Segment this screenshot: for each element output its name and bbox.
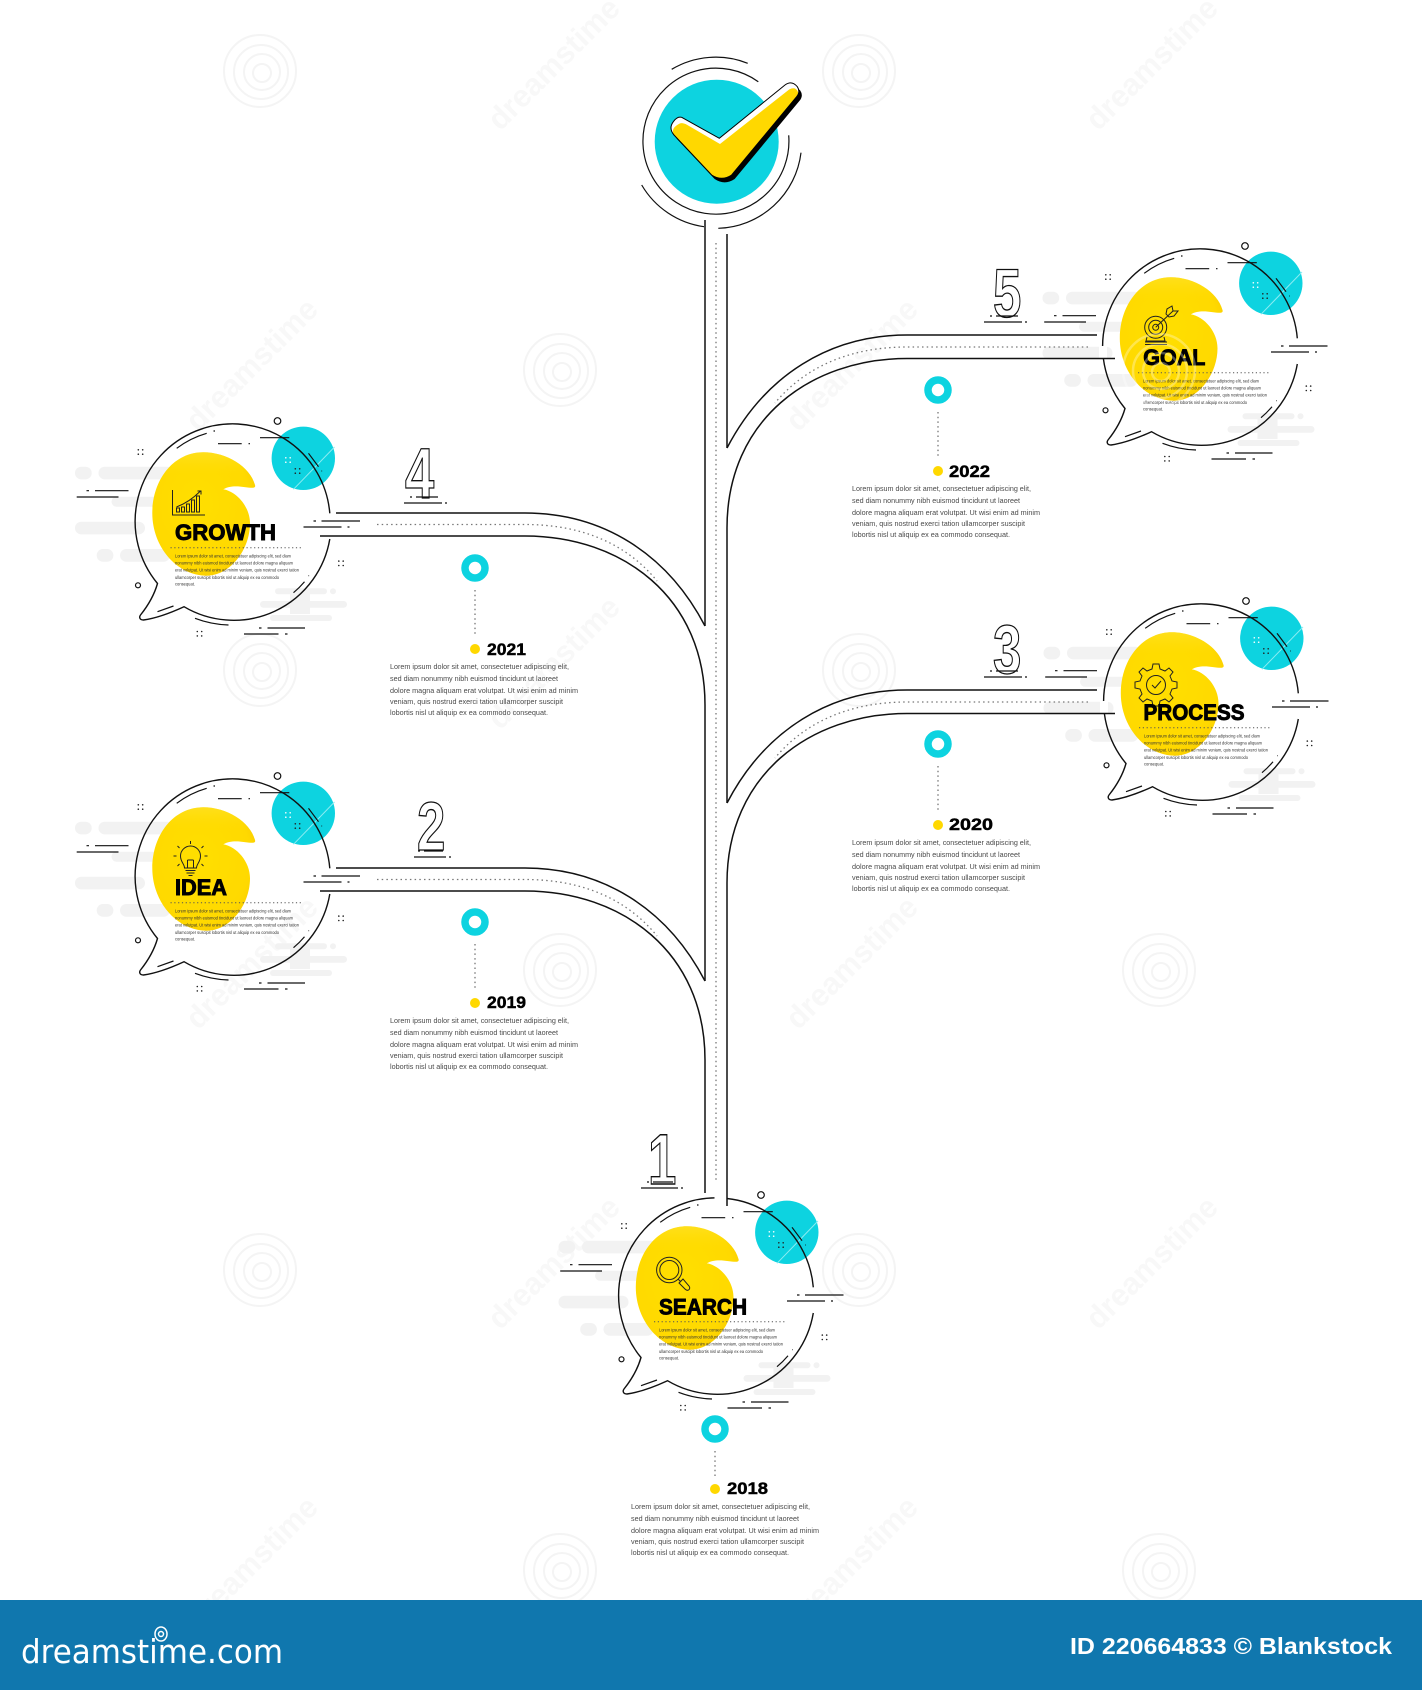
milestone 2021: sed diam nonummy nibh euismod tincidunt ut laoreet — [390, 674, 558, 683]
milestone 2021 — [390, 558, 578, 717]
text block: idea description: nonummy nibh euismod tincidunt ut laoreet dolore magna aliquam — [175, 916, 293, 920]
panel: search bubble — [558, 1192, 844, 1411]
text block: search description: Lorem ipsum dolor sit amet, consectetuer adipiscing elit, sed diam — [659, 1328, 775, 1333]
number 5: 5 — [993, 254, 1021, 332]
milestone 2022: veniam, quis nostrud exerci tation ullamcorper suscipit — [852, 519, 1025, 528]
panel: growth bubble — [75, 418, 360, 637]
milestone 2020: lobortis nisl ut aliquip ex ea commodo consequat. — [852, 884, 1010, 893]
text block: growth description: erat volutpat. Ut wisi enim ad minim veniam, quis nostrud exerci tation — [175, 568, 299, 572]
text block: search description: nonummy nibh euismod tincidunt ut laoreet dolore magna aliquam — [659, 1334, 777, 1340]
watermark pattern: dreamstime — [178, 291, 325, 438]
milestone 2022 — [852, 380, 1040, 539]
heading: process: PROCESS — [1144, 700, 1244, 725]
text block: process description: Lorem ipsum dolor sit amet, consectetuer adipiscing elit, sed diam — [1144, 734, 1260, 739]
milestone 2019: 2019 — [487, 994, 526, 1012]
watermark pattern: dreamstime — [178, 1489, 325, 1636]
text block: idea description: consequat. — [175, 936, 195, 942]
milestone 2021: dolore magna aliquam erat volutpat. Ut wisi enim ad minim — [390, 686, 578, 695]
text block: goal description: ullamcorper suscipit lobortis nisl ut aliquip ex ea commodo — [1143, 400, 1247, 405]
text block: idea description — [175, 909, 299, 942]
watermark pattern: dreamstime — [778, 889, 925, 1036]
number 4 — [404, 434, 447, 514]
text block: process description — [1144, 734, 1268, 766]
number 1: 1 — [648, 1121, 676, 1200]
text block: growth description — [175, 554, 299, 586]
watermark spiral over goal — [1123, 334, 1195, 406]
footer credit: ID 220664833 © Blankstock — [1070, 1633, 1392, 1659]
panel: goal bubble — [1042, 243, 1328, 462]
number 1 — [641, 1121, 683, 1200]
footer logo: dreamstime.com — [21, 1632, 283, 1671]
number 2: 2 — [417, 787, 445, 865]
milestone 2021: Lorem ipsum dolor sit amet, consectetuer adipiscing elit, — [390, 662, 569, 671]
milestone 2019: dolore magna aliquam erat volutpat. Ut wisi enim ad minim — [390, 1040, 578, 1049]
watermark pattern: dreamstime — [1078, 1189, 1225, 1336]
heading: growth: GROWTH — [175, 520, 276, 545]
check mark badge — [642, 57, 802, 228]
text block: idea description: ullamcorper suscipit lobortis nisl ut aliquip ex ea commodo — [175, 930, 279, 935]
number 3 — [984, 610, 1027, 688]
text block: search description: consequat. — [659, 1356, 679, 1360]
icon: gear with check — [1135, 664, 1177, 706]
milestone 2018: sed diam nonummy nibh euismod tincidunt ut laoreet — [631, 1514, 799, 1523]
watermark pattern: dreamstime — [480, 1189, 627, 1336]
text block: process description: nonummy nibh euismod tincidunt ut laoreet dolore magna aliquam — [1144, 740, 1262, 746]
text block: goal description: consequat. — [1143, 406, 1163, 412]
text block: goal description: Lorem ipsum dolor sit amet, consectetuer adipiscing elit, sed diam — [1143, 379, 1259, 384]
icon: light bulb — [174, 841, 208, 876]
text block: growth description: Lorem ipsum dolor sit amet, consectetuer adipiscing elit, sed diam — [175, 554, 291, 559]
panel: idea bubble — [75, 773, 360, 992]
text block: goal description: erat volutpat. Ut wisi enim ad minim veniam, quis nostrud exerci tation — [1143, 392, 1267, 398]
heading: idea: IDEA — [175, 875, 227, 900]
text block: process description: erat volutpat. Ut wisi enim ad minim veniam, quis nostrud exerci tation — [1144, 748, 1268, 752]
milestone 2020 — [852, 734, 1040, 893]
milestone 2019: lobortis nisl ut aliquip ex ea commodo consequat. — [390, 1062, 548, 1071]
milestone 2018: veniam, quis nostrud exerci tation ullamcorper suscipit — [631, 1537, 804, 1546]
watermark pattern: dreamstime — [778, 291, 925, 438]
number 5 — [984, 254, 1027, 332]
milestone 2018: dolore magna aliquam erat volutpat. Ut wisi enim ad minim — [631, 1526, 819, 1535]
text block: idea description: erat volutpat. Ut wisi enim ad minim veniam, quis nostrud exerci tation — [175, 922, 299, 928]
milestone 2019: sed diam nonummy nibh euismod tincidunt ut laoreet — [390, 1028, 558, 1037]
milestone 2021: lobortis nisl ut aliquip ex ea commodo consequat. — [390, 708, 548, 717]
text block: growth description: consequat. — [175, 582, 195, 586]
text block: process description: consequat. — [1144, 762, 1164, 766]
heading: goal: GOAL — [1143, 345, 1205, 370]
milestone 2018: Lorem ipsum dolor sit amet, consectetuer adipiscing elit, — [631, 1502, 810, 1511]
text block: search description: ullamcorper suscipit lobortis nisl ut aliquip ex ea commodo — [659, 1349, 763, 1354]
milestone 2019: Lorem ipsum dolor sit amet, consectetuer adipiscing elit, — [390, 1016, 569, 1025]
milestone 2022: lobortis nisl ut aliquip ex ea commodo consequat. — [852, 530, 1010, 539]
milestone 2020: veniam, quis nostrud exerci tation ullamcorper suscipit — [852, 873, 1025, 882]
timeline roads — [320, 220, 1115, 1206]
milestone 2019 — [390, 912, 578, 1071]
milestone 2020: 2020 — [949, 816, 993, 834]
milestone 2018: lobortis nisl ut aliquip ex ea commodo consequat. — [631, 1548, 789, 1557]
milestone 2022: dolore magna aliquam erat volutpat. Ut wisi enim ad minim — [852, 508, 1040, 517]
footer band — [0, 1600, 1422, 1690]
text block: idea description: Lorem ipsum dolor sit amet, consectetuer adipiscing elit, sed diam — [175, 909, 291, 914]
text block: growth description: ullamcorper suscipit lobortis nisl ut aliquip ex ea commodo — [175, 575, 279, 580]
milestone 2019: veniam, quis nostrud exerci tation ullamcorper suscipit — [390, 1051, 563, 1060]
heading: search: SEARCH — [659, 1294, 747, 1319]
text block: growth description: nonummy nibh euismod tincidunt ut laoreet dolore magna aliquam — [175, 560, 293, 566]
milestone 2020: sed diam nonummy nibh euismod tincidunt ut laoreet — [852, 850, 1020, 859]
text block: goal description: nonummy nibh euismod tincidunt ut laoreet dolore magna aliquam — [1143, 386, 1261, 390]
watermark pattern — [178, 0, 1225, 1636]
number 3: 3 — [993, 610, 1021, 688]
milestone 2022: sed diam nonummy nibh euismod tincidunt ut laoreet — [852, 496, 1020, 505]
number 4: 4 — [405, 434, 434, 514]
milestone 2018 — [631, 1419, 819, 1557]
milestone 2022: Lorem ipsum dolor sit amet, consectetuer adipiscing elit, — [852, 484, 1031, 493]
milestone 2018: 2018 — [727, 1480, 768, 1498]
text block: search description — [659, 1328, 783, 1360]
text block: process description: ullamcorper suscipit lobortis nisl ut aliquip ex ea commodo — [1144, 755, 1248, 760]
milestone 2022: 2022 — [949, 463, 990, 481]
milestone 2020: Lorem ipsum dolor sit amet, consectetuer adipiscing elit, — [852, 838, 1031, 847]
watermark pattern: dreamstime — [778, 1489, 925, 1636]
watermark pattern: dreamstime — [178, 889, 325, 1036]
text block: goal description — [1143, 379, 1267, 412]
watermark pattern: dreamstime — [480, 589, 627, 736]
text block: search description: erat volutpat. Ut wisi enim ad minim veniam, quis nostrud exerci tation — [659, 1342, 783, 1346]
panel: process bubble — [1044, 598, 1328, 817]
milestone 2021: 2021 — [487, 641, 526, 659]
milestone 2021: veniam, quis nostrud exerci tation ullamcorper suscipit — [390, 697, 563, 706]
milestone 2020: dolore magna aliquam erat volutpat. Ut wisi enim ad minim — [852, 862, 1040, 871]
icon: target with arrow — [1145, 306, 1178, 344]
icon: magnifier — [657, 1257, 690, 1290]
icon: growth chart — [172, 490, 205, 515]
